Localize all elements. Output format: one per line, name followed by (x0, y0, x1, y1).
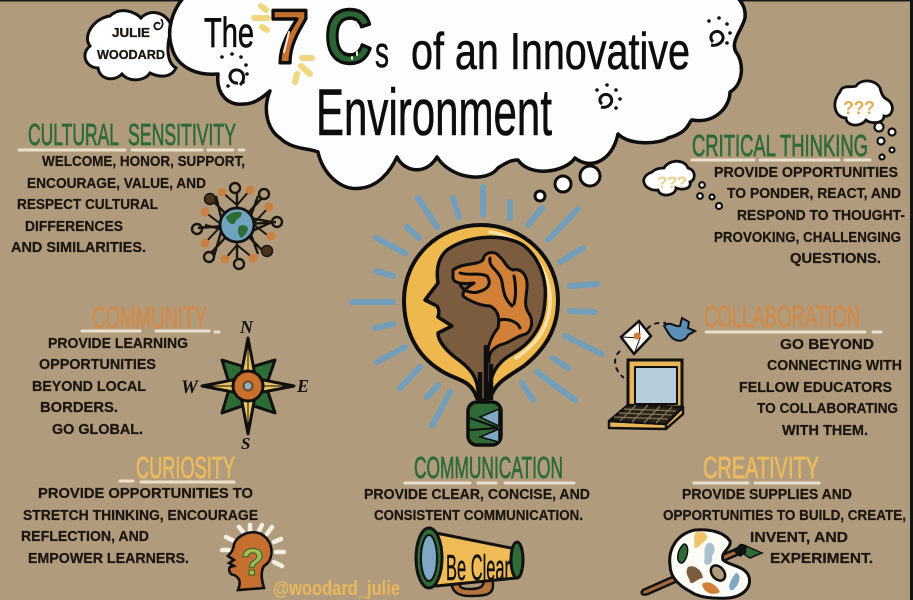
body: collaboration: TO COLLABORATING (757, 401, 898, 417)
bulb base (468, 402, 501, 445)
body: creativity: INVENT, AND (750, 530, 848, 546)
body: collaboration: GO BEYOND (780, 337, 874, 353)
small name cloud: WOODARD (97, 47, 165, 62)
title thought cloud (170, 0, 745, 189)
icon: paint palette (642, 530, 762, 598)
icon: megaphone: Be Clear (446, 547, 510, 588)
small name cloud: JULIE (112, 25, 150, 40)
body: community (32, 336, 188, 438)
body: collaboration: WITH THEM. (782, 423, 868, 439)
heading: creativity: CREATIVITY (703, 450, 819, 485)
highlights on 7 and C (284, 32, 289, 52)
icon: question thought clouds: ??? (657, 173, 687, 192)
body: collaboration: CONNECTING WITH (767, 358, 902, 374)
title line one (204, 0, 690, 81)
panel: creativity (663, 450, 906, 567)
body: curiosity: STRETCH THINKING, ENCOURAGE (23, 508, 258, 524)
body: cultural sensitivity: ENCOURAGE, VALUE, AND (27, 176, 206, 192)
body: curiosity: REFLECTION, AND (21, 529, 149, 545)
body: communication (364, 487, 590, 524)
heading: cultural sensitivity: SENSITIVITY (128, 117, 236, 152)
title line one: The (204, 9, 254, 56)
body: communication: PROVIDE CLEAR, CONCISE, AND (364, 487, 590, 503)
icon: question thought clouds (644, 81, 896, 209)
head silhouette (425, 237, 545, 400)
brain folds (460, 258, 520, 328)
bulb highlight (490, 232, 550, 358)
bulb glass (404, 225, 558, 398)
body: cultural sensitivity: AND SIMILARITIES. (11, 240, 146, 256)
heading: community: COMMUNITY (92, 300, 207, 335)
panel: cultural sensitivity (11, 117, 245, 256)
body: community: PROVIDE LEARNING (48, 336, 188, 352)
body: collaboration: FELLOW EDUCATORS (739, 380, 892, 396)
bulb wires (480, 345, 491, 402)
body: critical thinking: QUESTIONS. (790, 251, 881, 267)
cloud swirls (220, 16, 732, 110)
brain (453, 253, 532, 362)
body: critical thinking: PROVOKING, CHALLENGING (714, 230, 901, 246)
body: critical thinking: RESPOND TO THOUGHT- (737, 208, 905, 224)
body: cultural sensitivity (11, 154, 245, 256)
yellow sparkle marks (254, 6, 312, 82)
panel: community (32, 300, 219, 438)
panel: curiosity (21, 450, 258, 567)
icon: globe with people ring (192, 183, 282, 269)
icon: compass: E (296, 376, 309, 396)
icon: compass: S (241, 434, 250, 453)
panel: critical thinking (692, 128, 905, 267)
body: curiosity: PROVIDE OPPORTUNITIES TO (38, 486, 253, 502)
body: critical thinking (714, 165, 905, 267)
icon: compass: N (239, 317, 254, 337)
body: cultural sensitivity: DIFFERENCES (25, 219, 123, 235)
body: cultural sensitivity: RESPECT CULTURAL (17, 197, 158, 213)
body: curiosity (21, 486, 258, 567)
icon: question thought clouds: ??? (843, 98, 875, 118)
heading: curiosity: CURIOSITY (136, 450, 235, 485)
body: critical thinking: PROVIDE OPPORTUNITIES (714, 165, 898, 181)
thought bubbles from bulb to cloud (535, 166, 600, 201)
icon: head with question mark (222, 525, 284, 590)
body: creativity (663, 487, 906, 567)
small name cloud (85, 11, 176, 80)
body: creativity: PROVIDE SUPPLIES AND (682, 487, 852, 503)
body: critical thinking: TO PONDER, REACT, AND (727, 186, 901, 202)
panel: communication (364, 450, 590, 524)
icon: head with question mark: ? (241, 542, 264, 584)
handle credit: @woodard_julie (273, 578, 400, 600)
body: collaboration (739, 337, 902, 439)
icon: megaphone (416, 528, 523, 596)
body: communication: CONSISTENT COMMUNICATION. (374, 508, 583, 524)
body: creativity: EXPERIMENT. (770, 551, 873, 567)
title line one: s (375, 28, 389, 77)
body: cultural sensitivity: WELCOME, HONOR, SUPPORT, (42, 154, 245, 170)
body: community: BORDERS. (40, 400, 118, 416)
title line two: Environment (316, 75, 552, 149)
panel: collaboration (704, 299, 902, 439)
body: community: OPPORTUNITIES (39, 357, 156, 373)
body: curiosity: EMPOWER LEARNERS. (28, 551, 189, 567)
central light bulb (352, 187, 602, 445)
body: community: GO GLOBAL. (52, 422, 143, 438)
title line one: of an Innovative (411, 23, 690, 81)
icon: laptop with envelope and bird (609, 318, 695, 429)
body: community: BEYOND LOCAL (32, 379, 146, 395)
heading: communication: COMMUNICATION (414, 450, 563, 485)
heading: cultural sensitivity: CULTURAL (28, 117, 119, 152)
icon: compass: W (181, 377, 199, 398)
bulb rays (352, 187, 602, 426)
icon: compass (181, 317, 309, 453)
